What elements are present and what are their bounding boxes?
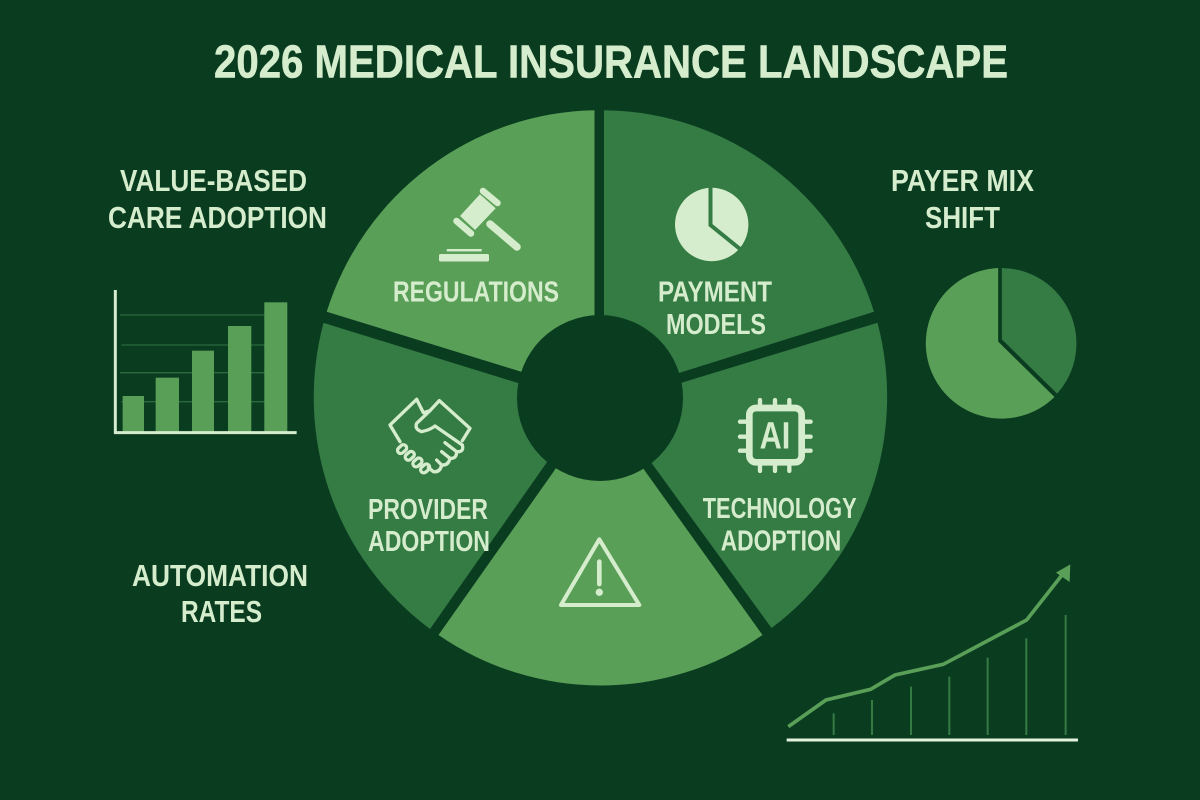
- icon: AI chip: AI: [760, 415, 790, 457]
- segment: technology adoption: [610, 323, 887, 628]
- label: provider adoption: PROVIDER: [368, 494, 488, 526]
- heading: value-based care adoption: [108, 163, 327, 235]
- heading: automation rates: RATES: [181, 594, 262, 629]
- label: technology adoption: TECHNOLOGY: [703, 493, 857, 525]
- segment: provider adoption: [314, 323, 590, 629]
- label: provider adoption: ADOPTION: [368, 526, 490, 558]
- center hub: [517, 315, 683, 481]
- panel: central wheel: [314, 110, 887, 685]
- label: technology adoption: ADOPTION: [721, 526, 841, 558]
- segment: payment models: [604, 110, 874, 396]
- title: 2026 MEDICAL INSURANCE LANDSCAPE: [214, 36, 1008, 88]
- heading: value-based care adoption: VALUE-BASED: [120, 163, 307, 198]
- icon: warning triangle: [561, 539, 639, 605]
- icon: gavel: [439, 191, 517, 262]
- icon: pie chart: [675, 186, 748, 261]
- icon: handshake: [390, 399, 470, 474]
- heading: payer mix shift: PAYER MIX: [891, 163, 1034, 198]
- pie chart: payer mix shift: [926, 268, 1076, 419]
- label: payment models: PAYMENT: [658, 276, 772, 308]
- segment: regulations: [327, 110, 594, 394]
- segment: risk warning: [438, 400, 762, 685]
- bar chart: value-based care adoption: [114, 290, 297, 433]
- label: regulations: REGULATIONS: [393, 276, 559, 308]
- heading: payer mix shift: [891, 163, 1034, 235]
- label: payment models: [658, 276, 772, 341]
- label: technology adoption: [703, 493, 857, 558]
- heading: value-based care adoption: CARE ADOPTION: [108, 200, 327, 235]
- heading: payer mix shift: SHIFT: [925, 200, 1000, 235]
- heading: automation rates: [132, 558, 308, 629]
- label: payment models: MODELS: [666, 309, 766, 341]
- line chart: automation rates: [787, 564, 1078, 740]
- icon: AI chip: [740, 400, 811, 471]
- label: provider adoption: [368, 494, 490, 558]
- heading: automation rates: AUTOMATION: [132, 558, 308, 593]
